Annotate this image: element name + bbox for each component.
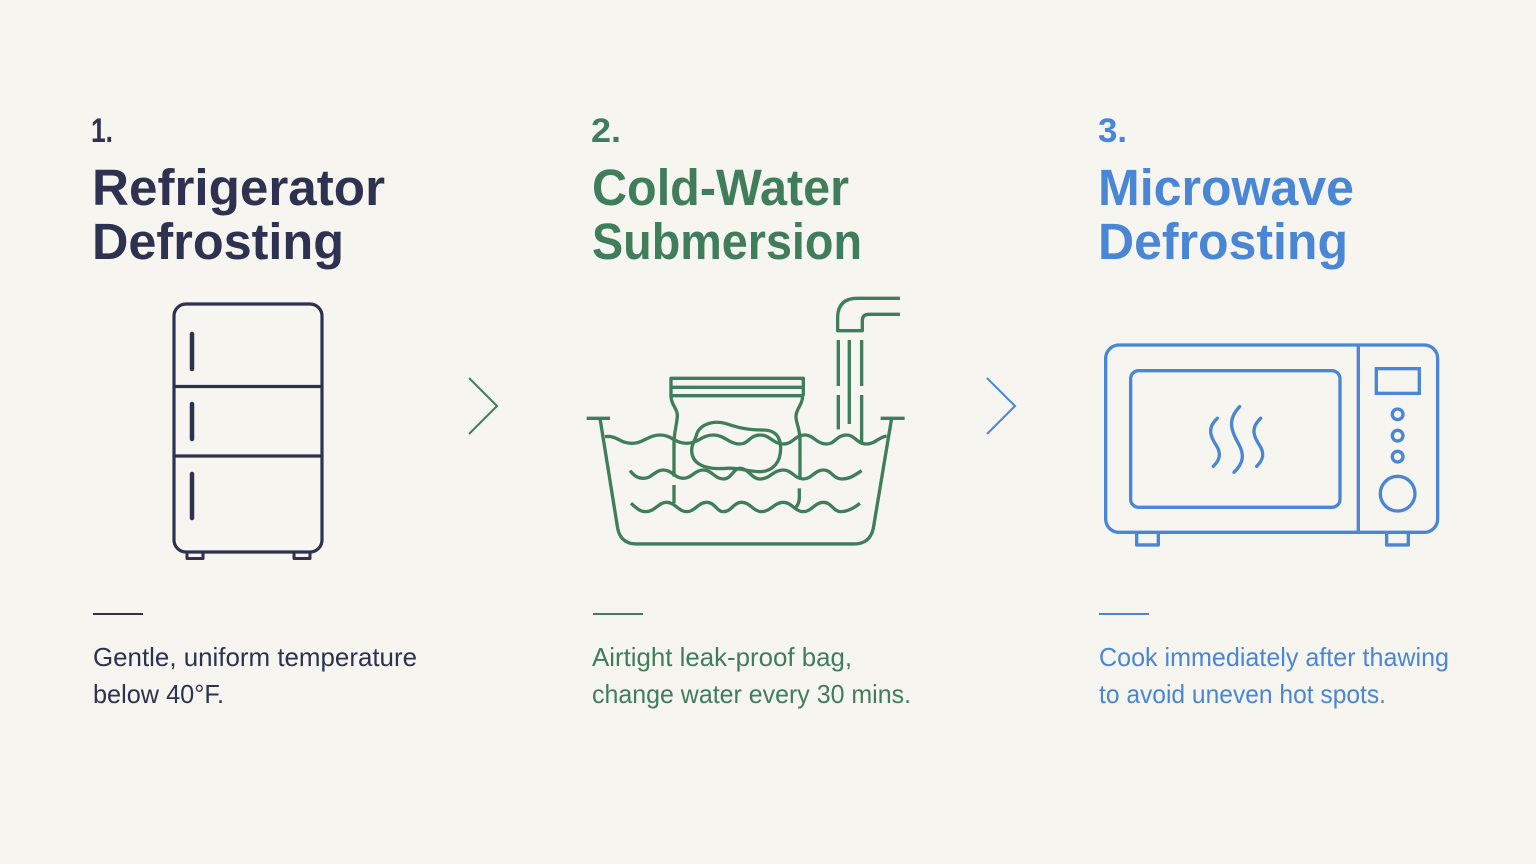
water waves xyxy=(605,435,887,512)
step number 2: 2. xyxy=(591,112,621,150)
feet xyxy=(1137,533,1408,545)
divider dash xyxy=(1099,613,1149,615)
body xyxy=(1106,345,1438,532)
description text: below 40°F. xyxy=(93,679,224,709)
heading: refrigerator defrosting: Defrosting xyxy=(92,213,344,270)
display xyxy=(1376,369,1419,393)
door window xyxy=(1131,371,1340,507)
divider dash xyxy=(593,613,643,615)
arrow: step 2 to step 3 xyxy=(987,378,1015,434)
dial xyxy=(1380,476,1415,511)
food item xyxy=(692,422,781,472)
heading: cold-water submersion: Cold-Water xyxy=(592,159,849,216)
heading: microwave defrosting: Microwave xyxy=(1098,159,1354,216)
bag xyxy=(671,378,803,508)
steam waves xyxy=(1211,407,1263,472)
description text: Gentle, uniform temperature xyxy=(93,642,417,672)
description text: to avoid uneven hot spots. xyxy=(1099,679,1386,709)
icon: bag in water basin under faucet xyxy=(587,298,905,544)
icon: refrigerator xyxy=(174,304,322,558)
description text: Cook immediately after thawing xyxy=(1099,642,1449,672)
heading: refrigerator defrosting xyxy=(92,159,385,270)
description text: change water every 30 mins. xyxy=(592,679,911,709)
control panel divider xyxy=(1353,345,1363,532)
step number 3: 3. xyxy=(1098,112,1127,150)
heading: refrigerator defrosting: Refrigerator xyxy=(92,159,385,216)
faucet xyxy=(838,298,900,331)
panel: cold-water submersion xyxy=(587,112,911,709)
basin xyxy=(587,418,905,544)
panel: refrigerator defrosting xyxy=(91,112,417,709)
description text xyxy=(592,642,911,709)
step number 1: 1. xyxy=(91,112,113,150)
icon: microwave xyxy=(1106,345,1438,545)
running water xyxy=(838,340,862,443)
description text: Airtight leak-proof bag, xyxy=(592,642,852,672)
description text xyxy=(1099,642,1449,709)
heading: microwave defrosting xyxy=(1098,159,1354,270)
divider dash xyxy=(93,613,143,615)
arrow: step 1 to step 2 xyxy=(469,378,497,434)
heading: microwave defrosting: Defrosting xyxy=(1098,213,1348,270)
buttons xyxy=(1392,409,1403,462)
heading: cold-water submersion xyxy=(592,159,862,270)
panel: microwave defrosting xyxy=(1098,112,1449,709)
description text xyxy=(93,642,417,709)
heading: cold-water submersion: Submersion xyxy=(592,213,862,270)
